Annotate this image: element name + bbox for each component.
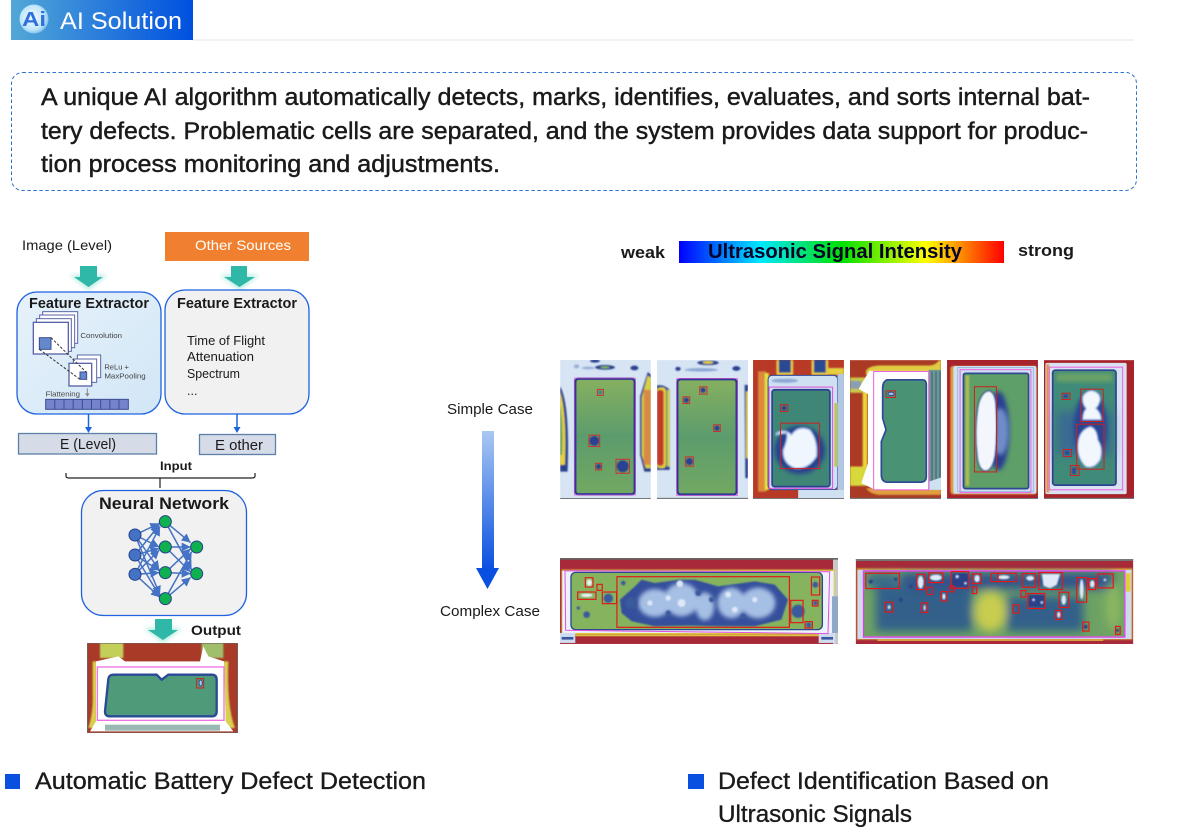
heading: feature extractor: Feature Extractor — [29, 295, 149, 312]
label: weak: weak — [620, 243, 666, 262]
arrow: to E (Level) — [85, 414, 92, 433]
label: Output: Output — [191, 622, 241, 638]
label: Simple Case: Simple Case — [447, 401, 533, 418]
label: strong: strong — [1018, 241, 1074, 260]
heading: AI Solution: AI Solution — [60, 8, 182, 35]
text: signal features: Attenuation — [187, 350, 254, 364]
arrow: to E other — [234, 414, 240, 433]
icon: AI logo: Ai — [22, 9, 46, 31]
text: signal features: Spectrum — [187, 367, 240, 381]
icon: convolution diagram: ReLu + — [104, 363, 130, 372]
image: output scan — [87, 643, 238, 733]
arrow: other sources input — [220, 266, 259, 290]
icon: AI logo — [20, 4, 48, 34]
callout: intro text — [12, 72, 1136, 190]
section label: ultrasonic identification: Defect Identification Based on — [718, 768, 1049, 795]
heading: Neural Network: Neural Network — [99, 494, 230, 513]
arrow: network output — [144, 619, 182, 643]
label: Input: Input — [160, 459, 192, 473]
icon: convolution diagram: Convolution — [80, 331, 122, 340]
label: Other Sources: Other Sources — [195, 237, 291, 253]
label: Image (Level): Image (Level) — [22, 237, 112, 253]
arrow: simple to complex — [476, 431, 499, 589]
section label: ultrasonic identification — [688, 768, 1049, 828]
label: Complex Case: Complex Case — [440, 603, 540, 620]
panel: neural network — [82, 490, 246, 616]
panel: image feature extractor — [17, 292, 161, 414]
label: Other Sources — [165, 232, 309, 261]
callout: intro text: tion process monitoring and adjustments. — [41, 151, 500, 178]
image: simple case scan 5 — [947, 360, 1038, 499]
box: E other: E other — [215, 438, 263, 454]
callout: intro text: A unique AI algorithm automatically detects, marks, identifies, evaluates, and sorts internal bat- — [41, 84, 1090, 111]
color scale: ultrasonic signal intensity — [620, 241, 1074, 263]
text: signal features: ... — [187, 384, 197, 398]
callout: intro text: tery defects. Problematic cells are separated, and the system provides data support for produc- — [41, 118, 1088, 145]
panel: other-source feature extractor — [165, 290, 309, 414]
box: E (Level) — [18, 434, 156, 454]
icon: convolution diagram: Flattening — [46, 389, 80, 398]
icon: convolution diagram: MaxPooling — [104, 371, 146, 380]
section label: ultrasonic identification: Ultrasonic Signals — [718, 801, 912, 828]
image: simple case scan 3 — [753, 360, 844, 499]
section label: automatic detection: Automatic Battery Defect Detection — [35, 768, 426, 795]
diagram: network nodes — [129, 516, 203, 605]
box: E other — [200, 434, 276, 454]
heading: feature extractor: Feature Extractor — [177, 295, 297, 312]
image: simple case scan 6 — [1044, 360, 1134, 499]
image: complex case scan 2 — [856, 559, 1134, 644]
image: complex case scan 1 — [560, 558, 838, 644]
arrow: image input — [70, 266, 107, 290]
panel: defect detection flowchart — [17, 232, 309, 733]
gradient bar: Ultrasonic Signal Intensity — [708, 241, 963, 263]
image: simple case scan 2 — [657, 360, 748, 499]
image: simple case scan 1 — [560, 360, 651, 499]
box: E (Level): E (Level) — [60, 437, 116, 453]
image: simple case scan 4 — [850, 360, 941, 499]
header banner — [11, 0, 1134, 40]
bracket: input merge — [66, 473, 255, 488]
text: signal features: Time of Flight — [187, 334, 266, 348]
text: signal features — [187, 334, 266, 398]
icon: convolution diagram — [33, 312, 146, 409]
